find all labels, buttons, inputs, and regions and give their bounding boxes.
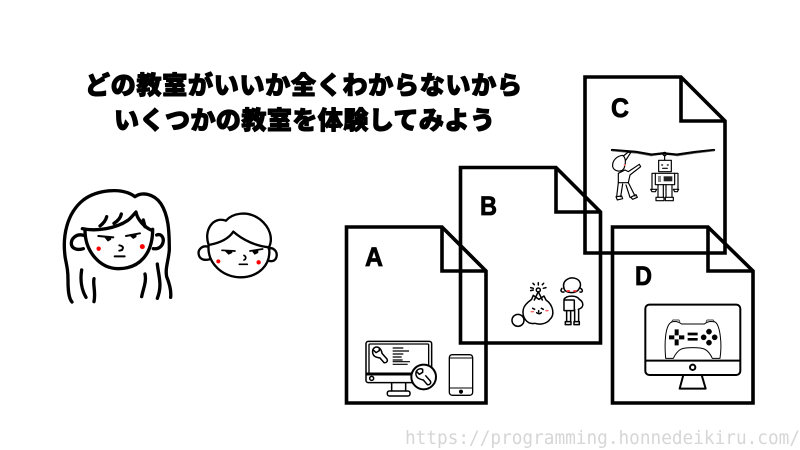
panel: document C	[585, 77, 725, 253]
icon: monitor with wrench and smartphone	[366, 341, 473, 396]
title: いくつかの教室を体験してみよう	[114, 107, 495, 135]
panel: document B	[460, 168, 600, 343]
icon: cat and child	[512, 278, 583, 326]
label: A: A	[365, 242, 383, 272]
label: C: C	[611, 93, 629, 123]
title	[85, 71, 522, 135]
icon: boy face	[199, 214, 277, 277]
icon: child and robot on zip line	[612, 150, 714, 201]
icon: monitor with game controller	[645, 305, 740, 389]
icon: girl face	[64, 191, 171, 302]
panel: document A	[346, 227, 486, 403]
label: B: B	[480, 191, 497, 221]
panel: document D	[612, 227, 753, 403]
title: どの教室がいいか全くわからないから	[85, 71, 522, 100]
label: D: D	[635, 261, 652, 291]
